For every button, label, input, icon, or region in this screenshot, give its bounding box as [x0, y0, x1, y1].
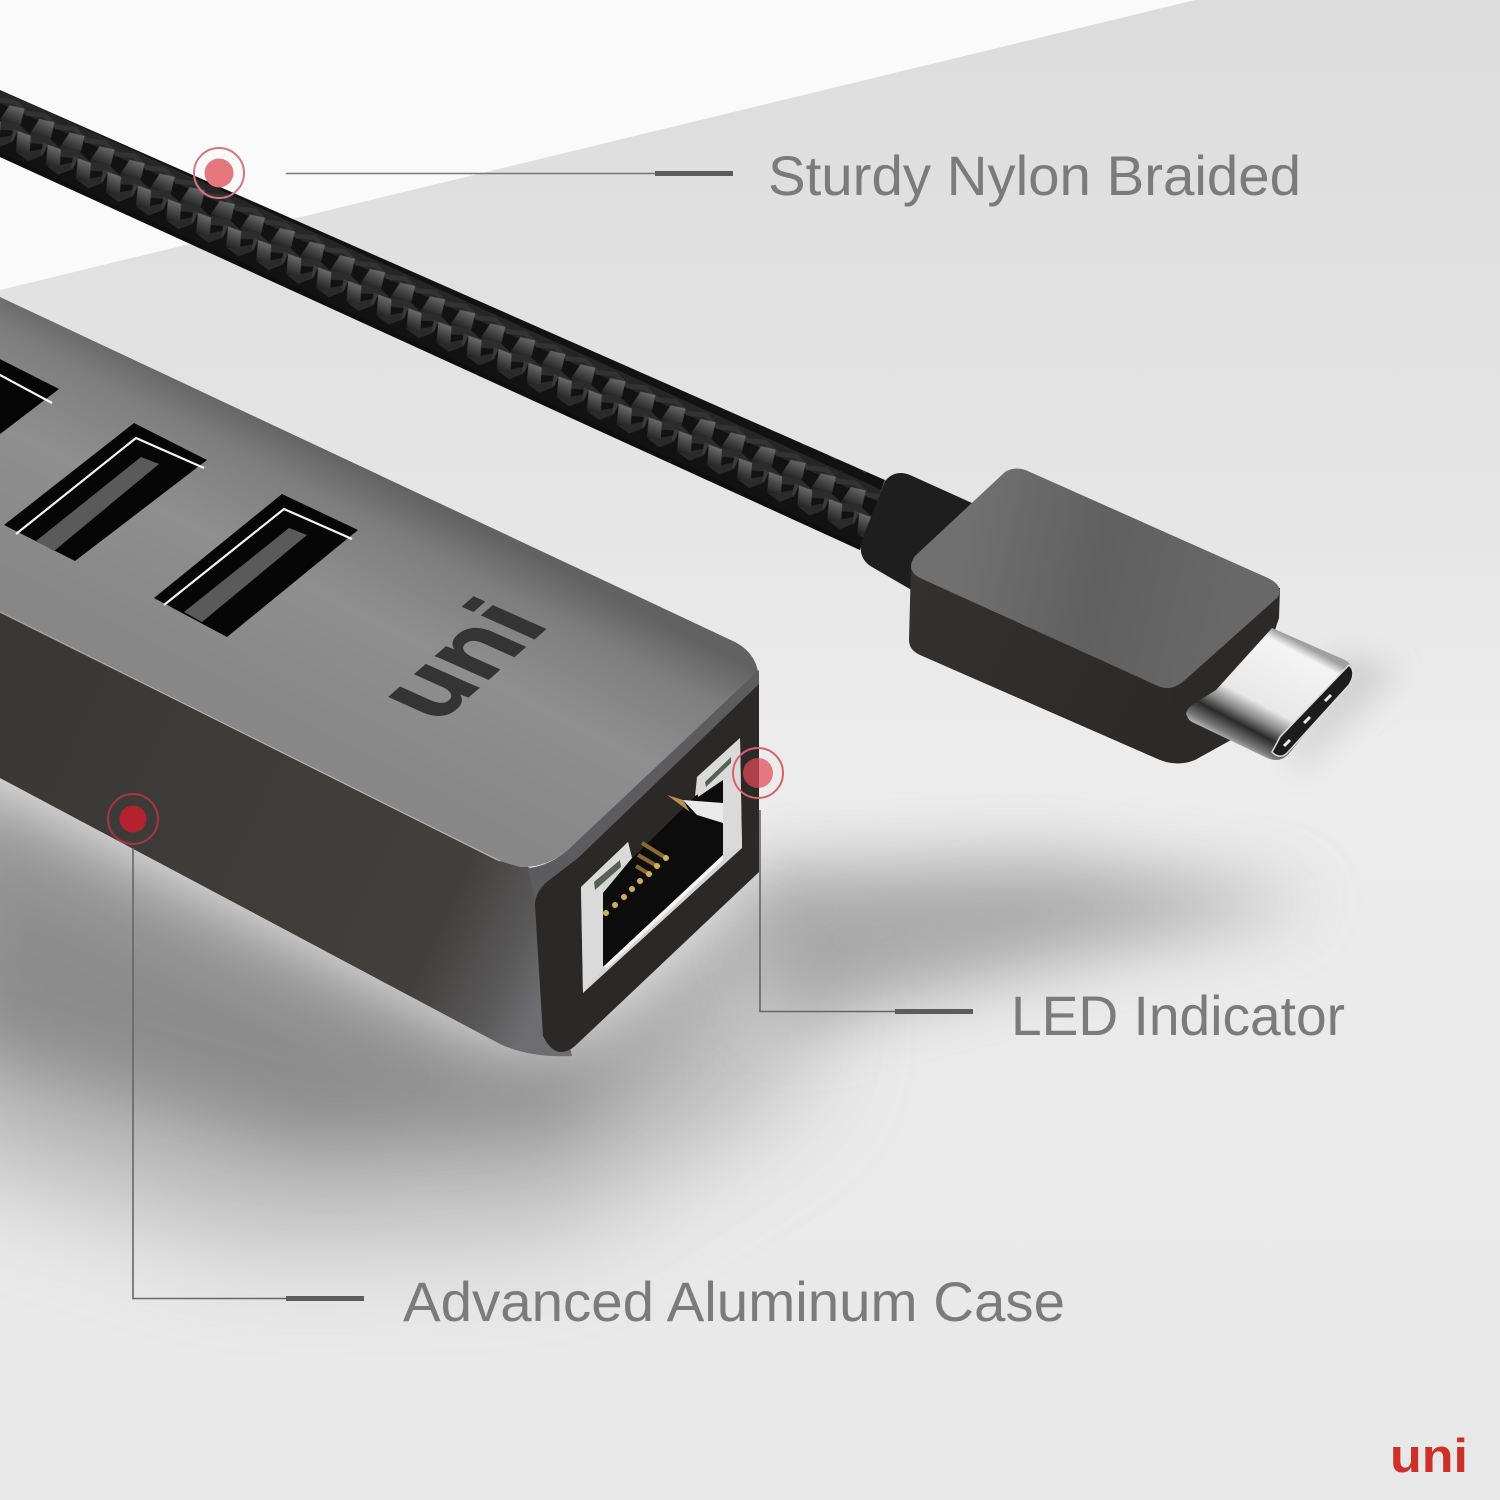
USB-C metal connector: [1186, 628, 1353, 760]
marker dot: [108, 794, 158, 844]
plug body front lip: [1172, 690, 1190, 763]
retainer flap: [683, 800, 723, 823]
label: Sturdy Nylon Braided: [768, 144, 1301, 207]
USB-C plug: [861, 468, 1353, 764]
LED window left: [594, 860, 621, 890]
hub top face: [0, 297, 759, 867]
marker dot: [733, 748, 783, 798]
braided nylon cable: [0, 90, 885, 550]
leader line: [760, 810, 973, 1014]
USB port 2: [4, 423, 207, 561]
callout: Sturdy Nylon Braided: [194, 144, 1301, 207]
strain relief: [861, 473, 972, 592]
front black face: [535, 684, 759, 1052]
silver frame: [581, 738, 742, 993]
leader line: [133, 848, 364, 1301]
aluminum hub: [0, 297, 759, 1056]
ethernet port: [581, 738, 742, 993]
USB port 1: [0, 352, 59, 490]
uni logo on hub: uni: [348, 585, 571, 733]
port opening: [603, 780, 723, 967]
hub side face: [0, 612, 572, 1056]
plug body side: [909, 565, 1280, 764]
label: LED Indicator: [1011, 984, 1345, 1047]
callout: LED Indicator: [733, 748, 1345, 1047]
LED window right: [705, 757, 731, 787]
left tab: [581, 842, 632, 993]
label: Advanced Aluminum Case: [403, 1270, 1065, 1333]
connector opening: [1272, 665, 1353, 756]
plug body top: [911, 468, 1280, 688]
brand logo: uni: [1390, 1429, 1468, 1482]
USB port 3: [154, 494, 358, 637]
callout: Advanced Aluminum Case: [108, 794, 1065, 1333]
shadow under hub: [0, 650, 1400, 1240]
marker dot: [194, 148, 244, 198]
right tab: [697, 738, 742, 855]
gold contacts: [603, 843, 669, 916]
leader line: [286, 171, 733, 176]
metal rim around front: [528, 670, 759, 902]
